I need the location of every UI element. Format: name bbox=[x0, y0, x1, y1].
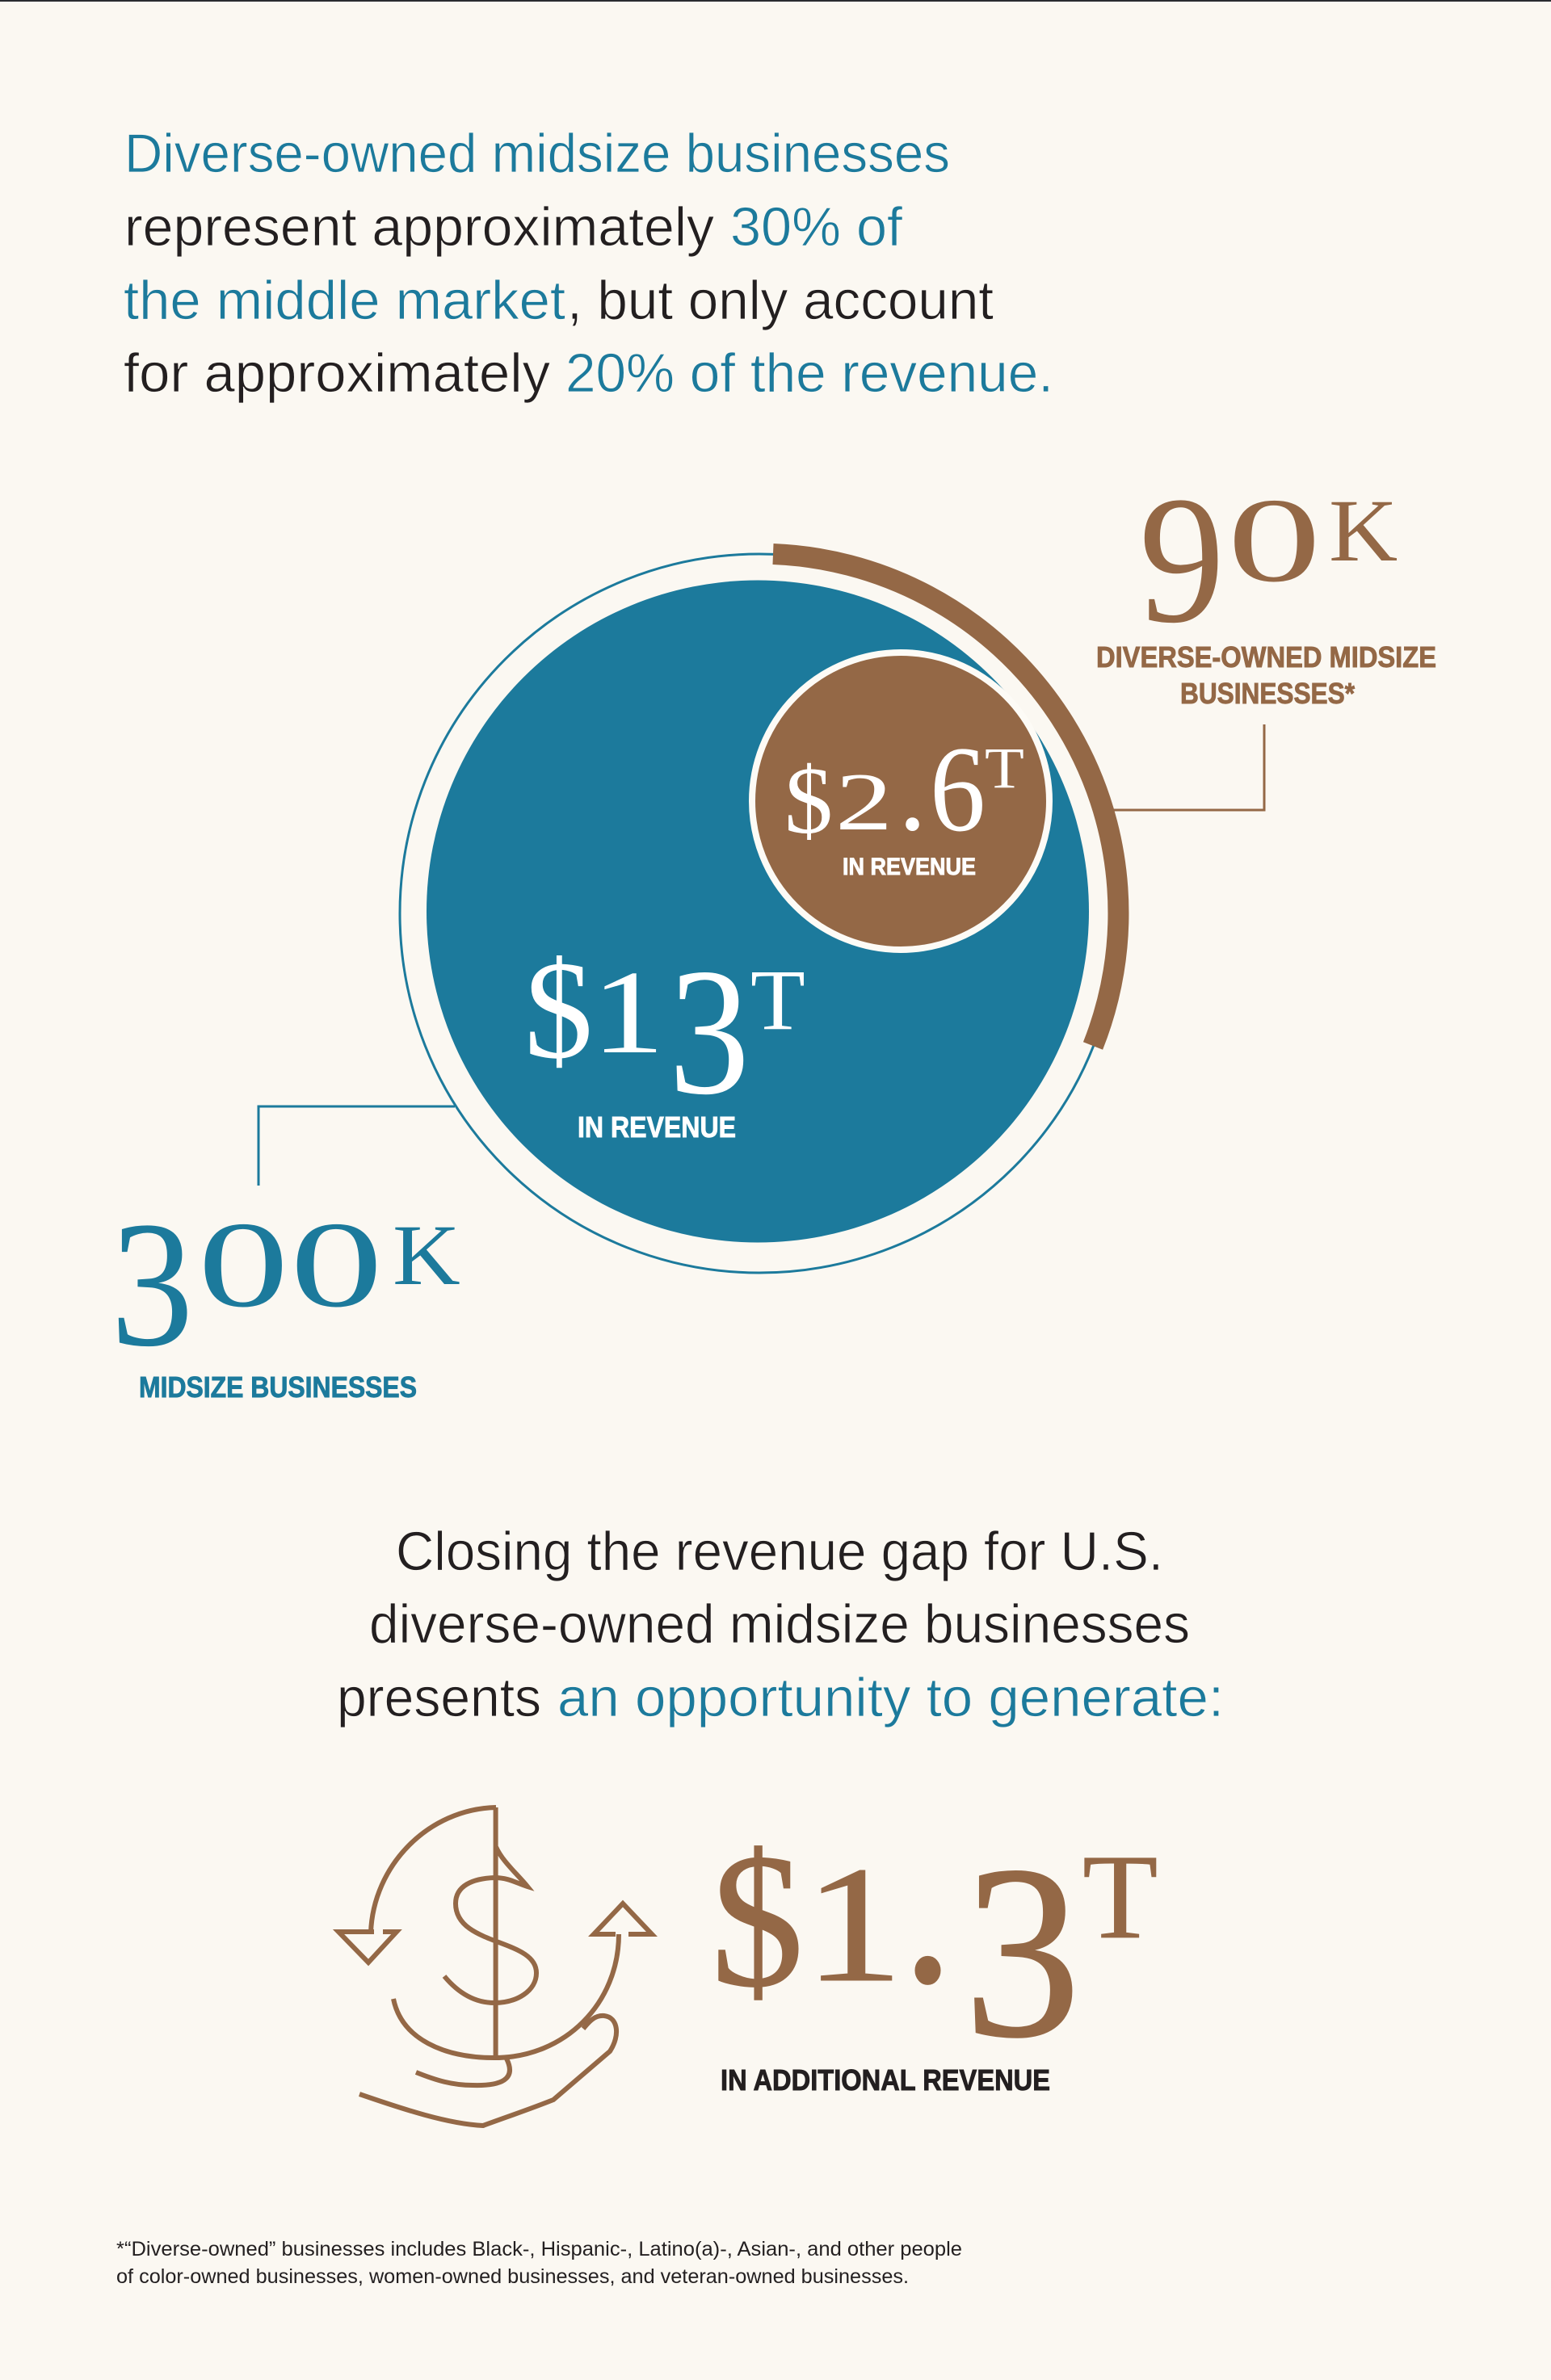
outer ring bbox=[400, 554, 1119, 1273]
chart: nested circles bbox=[400, 554, 1119, 1273]
top arc to left arrow bbox=[371, 1807, 496, 1933]
stat: 90K bbox=[1139, 460, 1398, 661]
hand outline bbox=[359, 2016, 616, 2126]
label: in additional revenue: IN ADDITIONAL REVENUE bbox=[721, 2063, 1050, 2097]
label: diverse-owned midsize businesses: DIVERSE-OWNED MIDSIZE bbox=[1096, 640, 1436, 674]
headline: represent approximately bbox=[124, 196, 714, 258]
subheading: closing the revenue gap bbox=[337, 1521, 1224, 1728]
stat: $1.3T: . bbox=[902, 1771, 954, 2032]
left arrow head bbox=[338, 1932, 397, 1962]
stat: $1.3T: $ bbox=[711, 1813, 804, 2027]
stat: $13T in revenue: T bbox=[750, 952, 805, 1048]
stat: $13T in revenue: 1 bbox=[591, 946, 665, 1078]
footnote bbox=[116, 2238, 962, 2288]
stat: 300K bbox=[111, 1185, 460, 1384]
small circle: diverse-owned revenue bbox=[752, 653, 1049, 950]
upper finger bbox=[416, 2059, 510, 2085]
subheading: closing the revenue gap: diverse-owned midsize businesses bbox=[369, 1593, 1190, 1655]
arc: diverse-owned share bbox=[773, 554, 1118, 1046]
stat: 300K: 0 bbox=[198, 1197, 288, 1333]
stat: 90K: K bbox=[1329, 481, 1398, 580]
stat: 300K: K bbox=[393, 1208, 460, 1303]
headline: , but only account bbox=[567, 270, 994, 331]
stat: $2.6T in revenue: 6 bbox=[930, 722, 986, 858]
headline: 20% of the revenue. bbox=[565, 342, 1053, 404]
stat: $1.3T: T bbox=[1082, 1829, 1158, 1964]
label: diverse-owned midsize businesses: BUSINESSES* bbox=[1180, 677, 1355, 710]
subheading: closing the revenue gap: Closing the revenue gap for U.S. bbox=[396, 1521, 1163, 1582]
stat: 300K: 3 bbox=[111, 1185, 193, 1384]
footnote: *“Diverse-owned” businesses includes Black-, Hispanic-, Latino(a)-, Asian-, and other people bbox=[116, 2238, 962, 2260]
label: midsize businesses: MIDSIZE BUSINESSES bbox=[139, 1370, 417, 1404]
stat: $2.6T in revenue: . bbox=[898, 728, 927, 854]
bottom arc to right arrow bbox=[393, 1934, 619, 2058]
stat: $2.6T in revenue: $ bbox=[784, 747, 833, 854]
stat: $2.6T in revenue: T bbox=[985, 735, 1024, 800]
label: diverse-owned midsize businesses bbox=[1096, 640, 1436, 710]
stat: $13T in revenue: IN REVENUE bbox=[578, 1110, 736, 1144]
headline bbox=[124, 123, 1053, 404]
headline: the middle market bbox=[124, 270, 565, 331]
subheading: closing the revenue gap: presents bbox=[337, 1667, 541, 1728]
stat: $1.3T: 1 bbox=[804, 1832, 903, 2017]
right arrow head bbox=[594, 1904, 652, 1934]
headline: Diverse-owned midsize businesses bbox=[124, 123, 950, 184]
icon: hand holding dollar with arrows bbox=[338, 1807, 652, 2126]
stat: $13T in revenue bbox=[524, 931, 805, 1144]
stat: $1.3T bbox=[711, 1771, 1158, 2089]
stat: 90K: 9 bbox=[1139, 460, 1225, 661]
stat: $1.3T: 3 bbox=[964, 1815, 1081, 2089]
footnote: of color-owned businesses, women-owned businesses, and veteran-owned businesses. bbox=[116, 2265, 909, 2288]
stat: $13T in revenue: $ bbox=[524, 933, 593, 1088]
stat: $13T in revenue: 3 bbox=[669, 931, 750, 1133]
stat: $2.6T in revenue: IN REVENUE bbox=[843, 854, 976, 880]
stat: $2.6T in revenue bbox=[784, 722, 1024, 880]
subheading: closing the revenue gap: an opportunity to generate: bbox=[557, 1667, 1224, 1728]
headline: for approximately bbox=[124, 342, 550, 404]
filled circle: all midsize businesses bbox=[427, 580, 1089, 1242]
connector line: 300K bbox=[258, 1106, 455, 1186]
headline: 30% of bbox=[730, 196, 902, 258]
connector line: 90K bbox=[1113, 724, 1264, 810]
dollar top curl bbox=[444, 1847, 536, 2003]
dollar vertical bar bbox=[494, 1807, 498, 2058]
stat: 300K: 0 bbox=[290, 1197, 383, 1333]
stat: 90K: 0 bbox=[1227, 474, 1321, 607]
stat: $2.6T in revenue: 2 bbox=[835, 756, 893, 847]
